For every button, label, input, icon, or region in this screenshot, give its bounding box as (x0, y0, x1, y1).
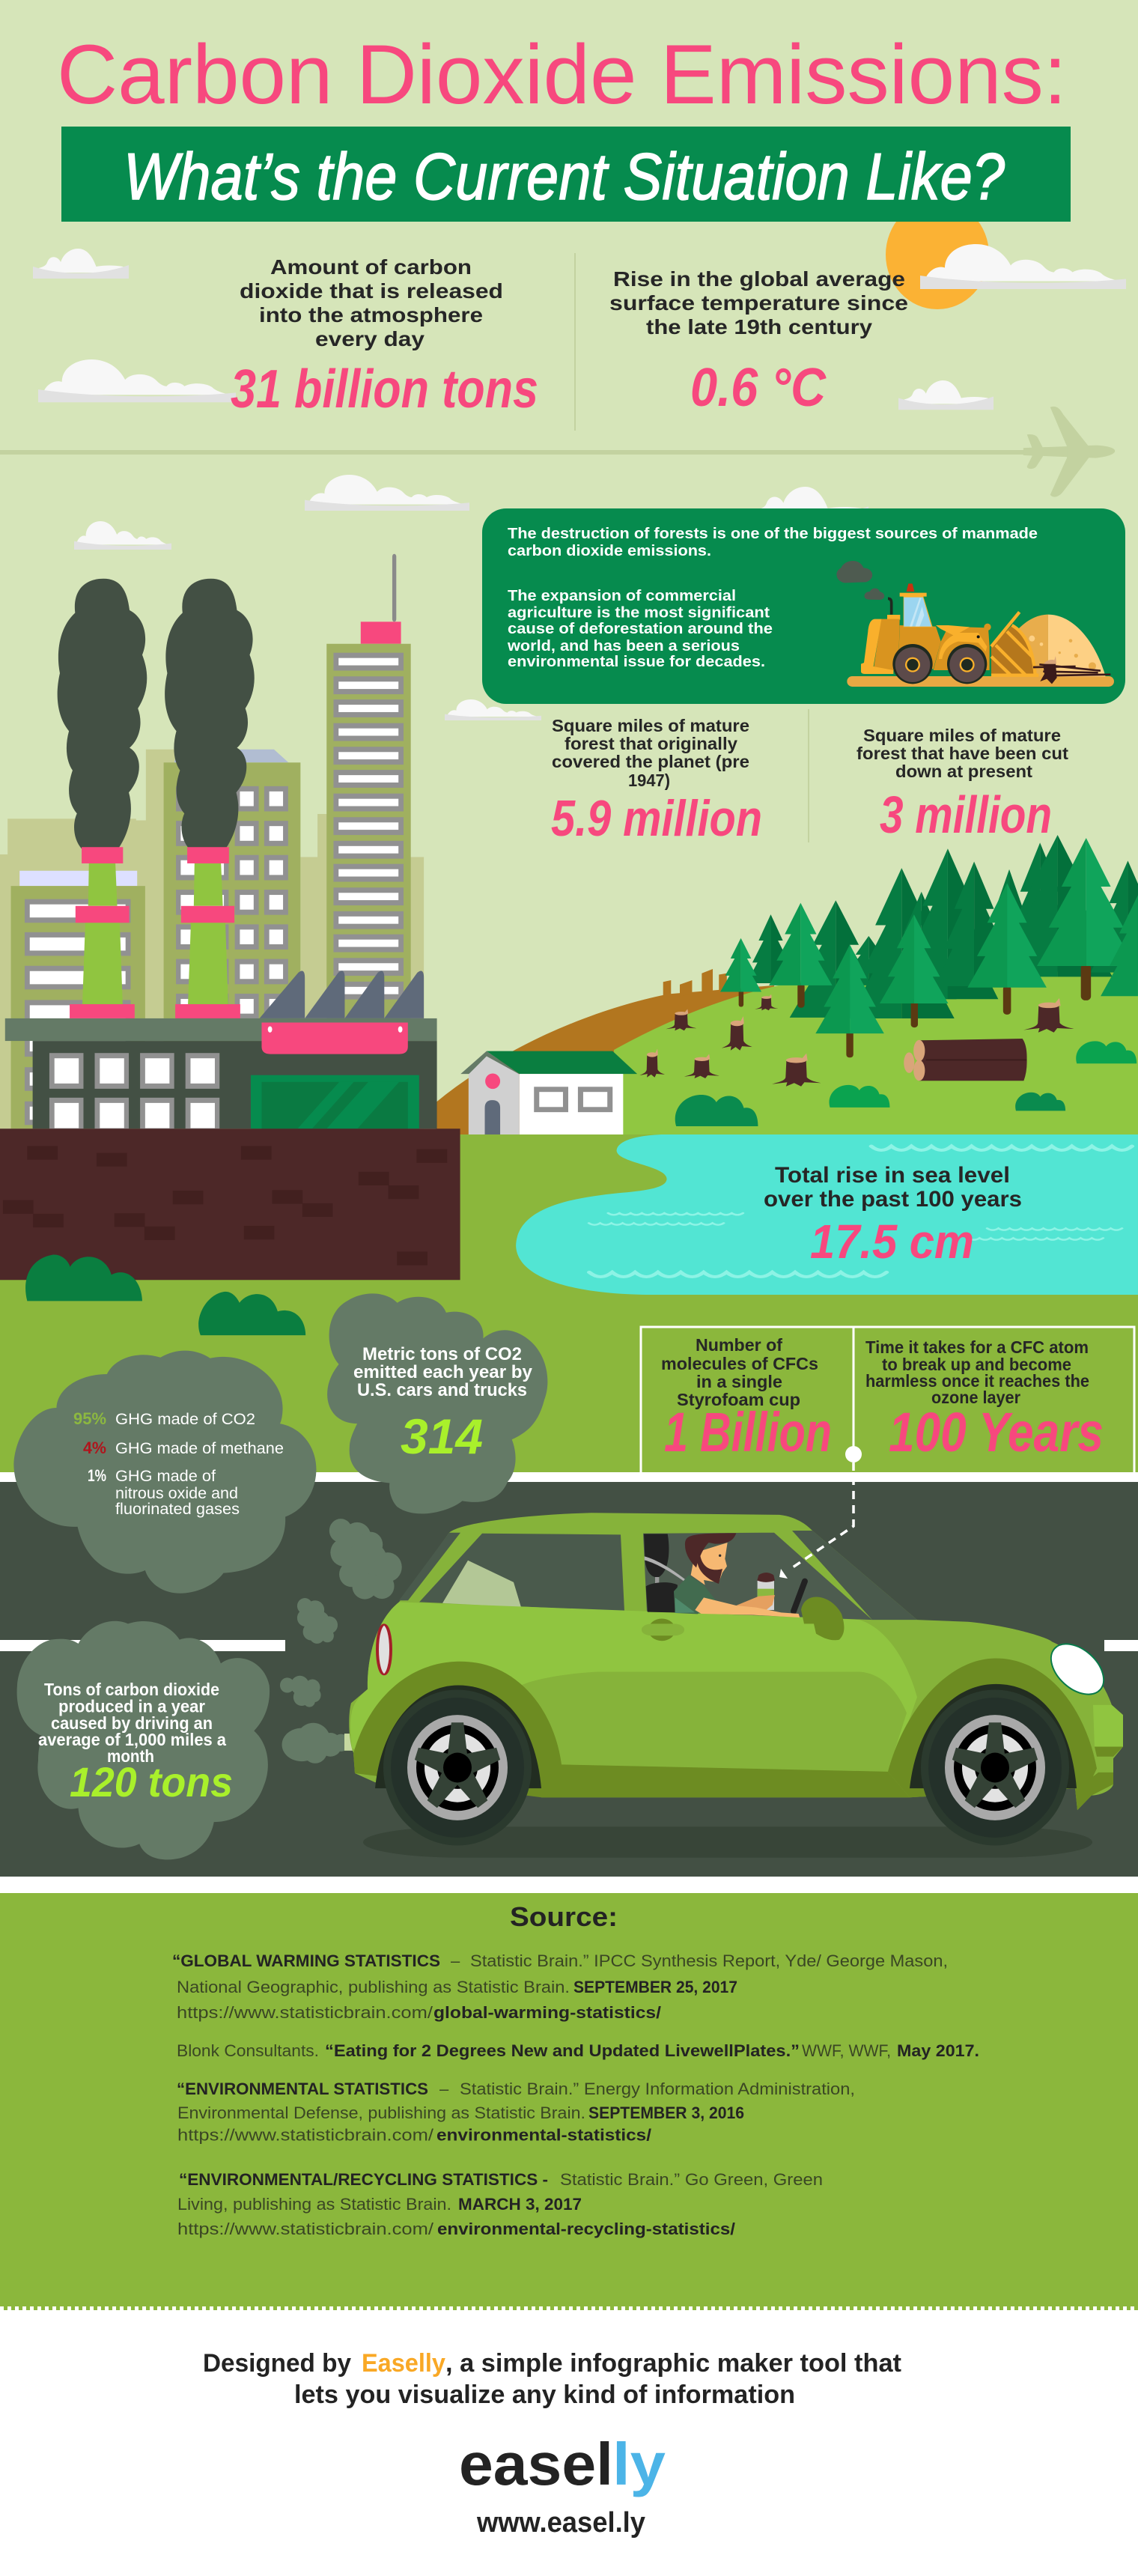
website link: www.easel.ly (476, 2507, 645, 2539)
panel: sources: environmental-recycling-statistics/ (437, 2220, 735, 2238)
panel: sources: WWF, WWF, (802, 2041, 891, 2060)
grass ground (0, 1134, 1138, 1472)
callout: driving emissions cloud (17, 1621, 270, 1859)
car headlight (1041, 1634, 1113, 1704)
panel: sources: – (451, 1951, 460, 1970)
callout: GHG composition cloud: 95% (73, 1409, 106, 1428)
stat: temperature rise: Rise in the global average (613, 267, 905, 291)
callout: GHG composition cloud: 4% (83, 1439, 106, 1457)
callout: cars and trucks cloud: 314 (401, 1409, 483, 1464)
callout: driving emissions cloud: Tons of carbon dioxide (44, 1680, 219, 1699)
callout: driving emissions cloud: 120 tons (70, 1758, 233, 1805)
footer credit: lets you visualize any kind of information (294, 2381, 795, 2409)
panel: sources: Blonk Consultants. (177, 2041, 319, 2060)
panel: sources: National Geographic, publishing as Statistic Brain. (177, 1978, 570, 1996)
stat: carbon dioxide released daily (231, 255, 538, 419)
stat: carbon dioxide released daily: dioxide that is released (240, 279, 503, 303)
stat: forest cut down: down at present (895, 762, 1032, 781)
stat: carbon dioxide released daily: Amount of carbon (270, 255, 472, 279)
panel: sources: “ENVIRONMENTAL STATISTICS (177, 2080, 428, 2098)
footer credit: , a simple infographic maker tool that (445, 2349, 901, 2378)
panel: sources: Living, publishing as Statistic Brain. (177, 2195, 451, 2214)
stat: temperature rise: the late 19th century (646, 315, 872, 338)
callout: cars and trucks cloud: Metric tons of CO2 (362, 1344, 522, 1364)
stat: original forest: forest that originally (565, 734, 737, 753)
callout: GHG composition cloud: fluorinated gases (115, 1501, 240, 1518)
callout: GHG composition cloud: GHG made of methane (115, 1440, 284, 1457)
callout: GHG composition cloud: nitrous oxide and (115, 1485, 238, 1502)
panel: sources: Statistic Brain.” Energy Information Administration, (460, 2080, 855, 2098)
stat: temperature rise: surface temperature since (609, 291, 908, 315)
lake (516, 1134, 1138, 1295)
sky background (0, 0, 1138, 1472)
green hill (614, 959, 1138, 1138)
callout: driving emissions cloud: caused by driving an (51, 1713, 213, 1733)
stat: forest cut down: forest that have been cut (856, 744, 1068, 763)
stat: original forest: Square miles of mature (552, 716, 749, 735)
callout: GHG composition cloud: GHG made of CO2 (115, 1411, 255, 1428)
panel: CFC facts: Styrofoam cup (677, 1390, 800, 1409)
panel: sources: “GLOBAL WARMING STATISTICS (172, 1951, 440, 1970)
foreground bushes (25, 1254, 305, 1335)
callout: cars and trucks cloud (327, 1293, 547, 1513)
house (460, 1051, 637, 1134)
icon: bulldozer with sand mound (836, 561, 1114, 687)
stat: forest cut down: 3 million (880, 786, 1052, 844)
callout: driving emissions cloud: average of 1,000 miles a (38, 1730, 226, 1749)
driver with coffee cup (644, 1533, 805, 1617)
forest of trees (720, 835, 1138, 1057)
road (0, 1472, 1138, 1893)
factory and city scene (0, 554, 437, 1134)
easelly logo: easel (459, 2431, 613, 2497)
callout: GHG composition cloud (13, 1351, 316, 1594)
brick wall (0, 1128, 460, 1280)
panel: sources: SEPTEMBER 25, 2017 (573, 1978, 737, 1996)
panel: forest destruction (482, 508, 1125, 704)
icon: airplane with trail (0, 407, 1115, 497)
stat: sea level rise: over the past 100 years (764, 1187, 1022, 1212)
panel: CFC facts: Number of (696, 1335, 782, 1355)
panel: sources: May 2017. (897, 2041, 979, 2060)
panel: forest destruction: The destruction of forests is one of the biggest sources of manmade (508, 526, 1038, 542)
car wheels (383, 1690, 1069, 1845)
stat: original forest: 1947) (628, 771, 670, 790)
panel: sources: Source: (510, 1901, 618, 1932)
footer credit (203, 2349, 901, 2409)
panel: CFC facts: to break up and become (882, 1355, 1071, 1374)
panel: sources: Statistic Brain.” Go Green, Green (560, 2170, 823, 2189)
panel: CFC facts: ozone layer (931, 1388, 1020, 1407)
stat: sea level rise (764, 1163, 1022, 1269)
brown hill (436, 969, 774, 1138)
cut logs (904, 1039, 1027, 1081)
callout: cars and trucks cloud: emitted each year by (353, 1362, 533, 1382)
panel: CFC facts: molecules of CFCs (661, 1354, 818, 1373)
panel: forest destruction: world, and has been a serious (507, 638, 740, 654)
stat: original forest: 5.9 million (551, 790, 762, 847)
stat: original forest: covered the planet (pre (552, 752, 749, 771)
icon: sun (886, 200, 989, 309)
car (344, 1513, 1123, 1858)
panel: sources: – (439, 2080, 449, 2098)
title: Carbon Dioxide Emissions: (57, 28, 1067, 121)
panel: CFC facts: harmless once it reaches the (865, 1371, 1089, 1391)
panel: sources: Environmental Defense, publishing as Statistic Brain. (177, 2103, 585, 2122)
tree stumps (639, 994, 1074, 1087)
stat: carbon dioxide released daily: 31 billion tons (231, 359, 538, 419)
stat: forest cut down: Square miles of mature (863, 726, 1061, 745)
panel: forest destruction: cause of deforestation around the (508, 621, 773, 637)
panel: sources: environmental-statistics/ (436, 2125, 651, 2145)
panel: forest destruction: environmental issue for decades. (508, 654, 765, 670)
panel: forest destruction: carbon dioxide emissions. (508, 543, 711, 559)
panel: CFC facts: 1 Billion (664, 1401, 832, 1463)
panel: sources: MARCH 3, 2017 (458, 2195, 582, 2214)
panel: sources (0, 1893, 1138, 2310)
panel: forest destruction: The expansion of commercial (508, 588, 736, 604)
panel: sources: https://www.statisticbrain.com/ (177, 2125, 434, 2145)
panel: sources: “ENVIRONMENTAL/RECYCLING STATISTICS - (179, 2170, 548, 2189)
stat: temperature rise: 0.6 °C (690, 358, 827, 418)
footer credit: Designed by (203, 2349, 351, 2378)
panel: forest destruction: agriculture is the most significant (508, 605, 770, 622)
panel: sources: “Eating for 2 Degrees New and Updated LivewellPlates.” (325, 2041, 800, 2060)
callout: GHG composition cloud: GHG made of (115, 1468, 216, 1485)
panel: CFC facts: 100 Years (889, 1401, 1104, 1463)
stat: forest cut down (856, 726, 1068, 844)
stat: carbon dioxide released daily: into the atmosphere (259, 303, 483, 326)
panel: sources: Statistic Brain.” IPCC Synthesis Report, Yde/ George Mason, (470, 1951, 948, 1970)
hillside bushes (675, 1041, 1137, 1126)
panel: sources: global-warming-statistics/ (433, 2003, 661, 2022)
callout: driving emissions cloud: month (107, 1746, 154, 1766)
subtitle banner: What’s the Current Situation Like? (124, 139, 1005, 213)
stat: carbon dioxide released daily: every day (315, 327, 425, 350)
clouds (33, 244, 1126, 720)
callout: cars and trucks cloud: U.S. cars and trucks (357, 1380, 527, 1400)
callout: GHG composition cloud: 1% (88, 1466, 106, 1485)
panel: sources: https://www.statisticbrain.com/ (177, 2220, 434, 2238)
panel: CFC facts: in a single (696, 1372, 782, 1391)
panel: CFC facts: Time it takes for a CFC atom (865, 1337, 1089, 1357)
footer credit: Easelly (362, 2349, 445, 2378)
stat: sea level rise: Total rise in sea level (775, 1163, 1010, 1188)
stat: sea level rise: 17.5 cm (810, 1215, 974, 1269)
exhaust smoke puffs (280, 1519, 402, 1764)
panel: sources: https://www.statisticbrain.com/ (177, 2003, 433, 2022)
stat: original forest (551, 716, 762, 847)
callout: dashed arrow from CFC facts to cup (779, 1446, 862, 1579)
callout: driving emissions cloud: produced in a year (58, 1697, 205, 1716)
panel: sources: SEPTEMBER 3, 2016 (588, 2103, 744, 2122)
easelly logo: ly (612, 2431, 666, 2497)
panel: CFC facts (641, 1327, 1134, 1477)
stat: temperature rise (609, 267, 908, 418)
